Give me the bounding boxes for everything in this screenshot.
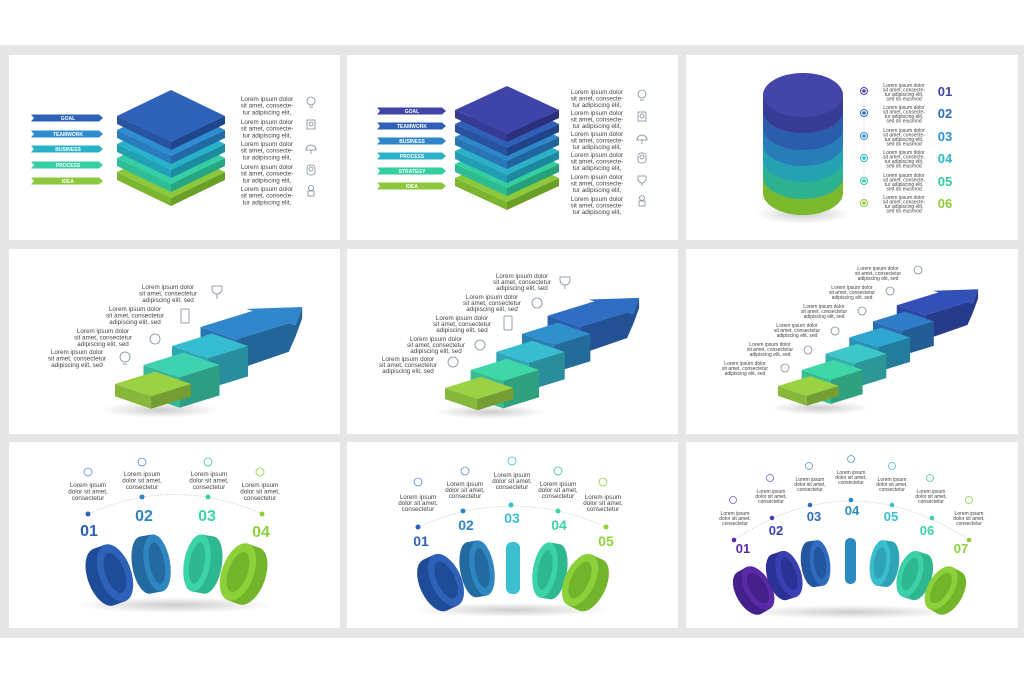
numbers: 01	[80, 523, 98, 540]
text blocks: tur adipiscing elit,	[243, 177, 292, 184]
text blocks: sit amet, consectetur	[801, 309, 847, 315]
text blocks: Lorem ipsum dolor	[883, 128, 925, 134]
text blocks: Lorem ipsum	[585, 494, 621, 501]
text blocks: Lorem ipsum dolor	[831, 285, 873, 291]
panel: rings 7	[686, 442, 1018, 628]
text blocks	[379, 273, 551, 375]
numbers: 06	[938, 196, 952, 211]
text blocks: Lorem ipsum	[796, 477, 824, 483]
text blocks: tur adipiscing elit,	[573, 123, 622, 130]
text blocks: Lorem ipsum dolor	[883, 195, 925, 201]
text blocks: Lorem ipsum dolor	[749, 342, 791, 348]
text blocks: Lorem ipsum dolor	[241, 119, 293, 126]
text blocks: tur adipiscing elit,	[885, 182, 923, 188]
icons	[781, 266, 922, 372]
text blocks: sit amet, consecte-	[883, 88, 925, 94]
numbers: 01	[736, 541, 750, 556]
text blocks: Lorem ipsum dolor	[571, 152, 623, 159]
text blocks: dolor sit amet,	[755, 494, 787, 500]
numbers: 04	[845, 503, 860, 518]
text blocks: sit amet, consecte-	[571, 202, 623, 210]
text blocks: tur adipiscing elit,	[573, 102, 622, 109]
text blocks: sit amet, consecte-	[241, 193, 293, 200]
text blocks: Lorem ipsum dolor	[77, 328, 129, 335]
text blocks: Lorem ipsum	[721, 511, 749, 517]
numbers: 02	[135, 508, 153, 525]
arc with dots	[416, 502, 608, 530]
shadow	[435, 405, 545, 419]
text blocks: consectetur	[449, 493, 481, 500]
text blocks: sit amet, consecte-	[883, 110, 925, 116]
text blocks: sit amet, consectetur	[106, 312, 164, 320]
text blocks: Lorem ipsum dolor	[109, 306, 161, 313]
text blocks: adipiscing elit, sed	[858, 276, 899, 282]
text blocks	[398, 472, 623, 513]
text blocks	[48, 284, 197, 369]
ribbon labels: TEAMWORK	[397, 124, 427, 130]
text blocks: sed do eiusmod	[886, 118, 922, 124]
stacked layers	[455, 86, 559, 210]
arc with dots	[732, 498, 971, 542]
text blocks: adipiscing elit, sed	[142, 297, 194, 304]
text blocks: tur adipiscing elit,	[243, 109, 292, 116]
ribbon labels: IDEA	[406, 184, 418, 190]
numbers: 03	[504, 510, 520, 526]
icons	[730, 456, 972, 504]
arc with dots	[86, 494, 264, 516]
text blocks: Lorem ipsum dolor	[142, 284, 194, 291]
panel: staircase 6	[686, 249, 1018, 434]
shadow	[100, 402, 220, 418]
text blocks: sit amet, consecte-	[883, 154, 925, 160]
text blocks: dolor sit amet,	[583, 500, 623, 507]
text blocks: Lorem ipsum dolor	[883, 173, 925, 179]
numbers: 04	[938, 151, 953, 166]
numbers	[736, 503, 968, 556]
text blocks: Lorem ipsum dolor	[466, 294, 518, 301]
text blocks: dolor sit amet,	[240, 488, 280, 496]
ribbon labels: GOAL	[61, 116, 75, 122]
text blocks: Lorem ipsum dolor	[803, 304, 845, 310]
text blocks: dolor sit amet,	[68, 488, 108, 496]
text blocks: adipiscing elit, sed	[51, 362, 103, 369]
text blocks: dolor sit amet,	[189, 478, 229, 484]
text blocks: Lorem ipsum	[242, 482, 278, 489]
text blocks: Lorem ipsum dolor	[571, 110, 623, 117]
ribbon labels: IDEA	[62, 179, 74, 185]
text blocks: sit amet, consecte-	[883, 200, 925, 206]
text blocks	[241, 96, 293, 206]
text blocks	[571, 89, 623, 216]
numbers: 05	[598, 533, 614, 549]
numbers: 04	[252, 524, 270, 541]
text blocks: tur adipiscing elit,	[885, 204, 923, 210]
text blocks: Lorem ipsum dolor	[883, 150, 925, 156]
text blocks: sed do eiusmod	[886, 186, 922, 192]
text blocks: consectetur	[72, 495, 104, 502]
rings	[410, 538, 616, 617]
numbers: 01	[938, 84, 952, 99]
text blocks: Lorem ipsum dolor	[241, 141, 293, 148]
stairs	[445, 298, 639, 410]
text blocks: tur adipiscing elit,	[573, 187, 622, 194]
text blocks: dolor sit amet,	[794, 482, 826, 488]
text blocks: Lorem ipsum dolor	[241, 96, 293, 103]
numbers: 01	[413, 533, 429, 549]
text blocks: adipiscing elit, sed	[496, 285, 548, 292]
text blocks: consectetur	[193, 484, 225, 491]
text blocks: Lorem ipsum dolor	[571, 89, 623, 96]
text blocks: sit amet, consectetur	[407, 342, 465, 349]
icons	[84, 458, 264, 476]
numbers	[80, 508, 270, 541]
text blocks: Lorem ipsum	[837, 470, 865, 476]
ribbon labels: BUSINESS	[399, 139, 425, 145]
text blocks: adipiscing elit, sed	[466, 306, 518, 313]
ribbon labels	[377, 108, 446, 190]
text blocks: consectetur	[797, 487, 823, 493]
ribbon labels: PROCESS	[56, 163, 81, 169]
text blocks: sed do eiusmod	[886, 96, 922, 102]
numbers: 05	[938, 174, 952, 189]
text blocks: sit amet, consecte-	[571, 138, 623, 144]
text blocks: sit amet, consectetur	[379, 362, 437, 369]
timeline dots	[860, 88, 868, 206]
panel: cylinder 6	[686, 55, 1018, 240]
text blocks: consectetur	[244, 495, 276, 502]
text blocks: Lorem ipsum dolor	[241, 164, 293, 171]
text blocks: Lorem ipsum dolor	[883, 83, 925, 89]
numbers: 04	[551, 517, 567, 533]
text blocks: sed do eiusmod	[886, 208, 922, 214]
text blocks: sit amet, consecte-	[571, 180, 623, 188]
numbers	[938, 84, 953, 211]
text blocks: tur adipiscing elit,	[885, 137, 923, 143]
text blocks: sit amet, consecte-	[571, 96, 623, 102]
icons	[414, 457, 607, 486]
text blocks: sit amet, consectetur	[493, 279, 551, 286]
text blocks: Lorem ipsum	[955, 511, 983, 517]
text blocks: Lorem ipsum dolor	[436, 315, 488, 322]
text blocks: consectetur	[587, 506, 619, 513]
shadow	[741, 605, 961, 619]
shadow	[755, 204, 851, 224]
text blocks: sit amet, consecte-	[883, 178, 925, 184]
text blocks: sit amet, consecte-	[571, 116, 623, 124]
ribbon labels: BUSINESS	[55, 147, 81, 153]
text blocks: Lorem ipsum	[494, 472, 530, 479]
text blocks: adipiscing elit, sed	[77, 341, 129, 348]
text blocks: dolor sit amet,	[915, 494, 947, 500]
text blocks: consectetur	[126, 484, 158, 491]
numbers: 02	[938, 106, 952, 121]
numbers: 05	[884, 509, 898, 524]
text blocks: tur adipiscing elit,	[885, 159, 923, 165]
text blocks: Lorem ipsum dolor	[382, 356, 434, 363]
text blocks: sit amet, consecte-	[241, 126, 293, 133]
text blocks: dolor sit amet,	[445, 487, 485, 494]
text blocks	[68, 471, 280, 502]
text blocks	[722, 266, 901, 377]
text blocks: dolor sit amet,	[538, 487, 578, 494]
text blocks: sit amet, consecte-	[241, 103, 293, 110]
text blocks: consectetur	[956, 521, 982, 527]
text blocks: adipiscing elit, sed	[109, 319, 161, 326]
text blocks: Lorem ipsum dolor	[857, 266, 899, 272]
shadow	[770, 401, 870, 415]
text blocks: Lorem ipsum	[757, 489, 785, 495]
panel: staircase 5	[347, 249, 678, 434]
numbers: 02	[458, 517, 474, 533]
text blocks: Lorem ipsum dolor	[571, 196, 623, 203]
text blocks: sit amet, consectetur	[433, 321, 491, 328]
panel: layered stack 6	[347, 55, 678, 240]
text blocks: Lorem ipsum	[540, 481, 576, 488]
numbers	[413, 510, 614, 549]
numbers: 03	[938, 129, 952, 144]
text blocks: Lorem ipsum	[400, 494, 436, 501]
text blocks: sit amet, consecte-	[241, 148, 293, 155]
text blocks: Lorem ipsum dolor	[496, 273, 548, 280]
text blocks: Lorem ipsum dolor	[724, 361, 766, 367]
text blocks: sit amet, consectetur	[747, 347, 793, 353]
text blocks: Lorem ipsum	[447, 481, 483, 488]
stairs	[778, 289, 978, 406]
text blocks: Lorem ipsum dolor	[776, 323, 818, 329]
ribbon labels	[31, 114, 103, 185]
ribbon labels: PROCESS	[400, 154, 425, 160]
text blocks: Lorem ipsum	[124, 471, 160, 478]
text blocks: adipiscing elit, sed	[804, 314, 845, 320]
text blocks: dolor sit amet,	[719, 516, 751, 522]
ribbon labels: STRATEGY	[399, 169, 426, 175]
text blocks: sit amet, consecte-	[241, 171, 293, 178]
panel: rings 4	[9, 442, 340, 628]
ribbon labels: GOAL	[405, 109, 419, 115]
text blocks: adipiscing elit, sed	[725, 371, 766, 377]
text blocks: sit amet, consectetur	[829, 290, 875, 296]
text blocks: tur adipiscing elit,	[243, 154, 292, 161]
panel: staircase 4	[9, 249, 340, 434]
numbers: 02	[769, 523, 783, 538]
text blocks: Lorem ipsum dolor	[571, 131, 623, 138]
shadow	[412, 603, 612, 617]
text blocks: Lorem ipsum dolor	[51, 349, 103, 356]
numbers: 06	[920, 523, 934, 538]
numbers: 03	[198, 508, 216, 525]
stairs	[115, 307, 302, 409]
icons	[448, 277, 570, 367]
text blocks: sit amet, consecte-	[571, 158, 623, 166]
text blocks: sed do eiusmod	[886, 142, 922, 148]
text blocks: Lorem ipsum dolor	[410, 336, 462, 343]
text blocks: sit amet, consectetur	[74, 334, 132, 342]
text blocks	[883, 83, 925, 214]
text blocks: dolor sit amet,	[953, 516, 985, 522]
text blocks: adipiscing elit, sed	[832, 295, 873, 301]
cylinder layers	[763, 73, 843, 215]
text blocks: consectetur	[722, 521, 748, 527]
numbers: 07	[954, 541, 968, 556]
text blocks: tur adipiscing elit,	[885, 92, 923, 98]
icons	[306, 97, 316, 196]
text blocks: tur adipiscing elit,	[573, 165, 622, 172]
text blocks: sit amet, consectetur	[855, 271, 901, 277]
text blocks: adipiscing elit, sed	[777, 333, 818, 339]
text blocks: dolor sit amet,	[398, 500, 438, 507]
text blocks: adipiscing elit, sed	[750, 352, 791, 358]
text blocks	[719, 470, 985, 527]
text blocks: sit amet, consectetur	[774, 328, 820, 334]
text blocks: tur adipiscing elit,	[885, 114, 923, 120]
text blocks: sit amet, consectetur	[139, 290, 197, 298]
text blocks: tur adipiscing elit,	[243, 199, 292, 206]
text blocks: Lorem ipsum	[917, 489, 945, 495]
text blocks: sed do eiusmod	[886, 164, 922, 170]
rings	[78, 532, 275, 611]
shadow	[75, 597, 275, 613]
text blocks: consectetur	[838, 480, 864, 486]
text blocks: sit amet, consectetur	[48, 356, 106, 362]
text blocks: tur adipiscing elit,	[573, 209, 622, 216]
text blocks: tur adipiscing elit,	[573, 144, 622, 151]
text blocks: sit amet, consectetur	[722, 366, 768, 372]
text blocks: Lorem ipsum	[878, 477, 906, 483]
text blocks: Lorem ipsum dolor	[241, 186, 293, 193]
text blocks: Lorem ipsum dolor	[571, 174, 623, 181]
text blocks: sit amet, consectetur	[463, 300, 521, 307]
text blocks: adipiscing elit, sed	[382, 368, 434, 375]
icons	[120, 286, 222, 364]
panel: rings 5	[347, 442, 678, 628]
text blocks: consectetur	[402, 506, 434, 513]
text blocks: dolor sit amet,	[122, 478, 162, 484]
text blocks: Lorem ipsum	[191, 471, 227, 478]
text blocks: consectetur	[542, 493, 574, 500]
text blocks: adipiscing elit, sed	[410, 348, 462, 355]
text blocks: Lorem ipsum	[70, 482, 106, 489]
rings	[726, 538, 973, 620]
text blocks: dolor sit amet,	[492, 478, 532, 485]
text blocks: adipiscing elit, sed	[436, 327, 488, 334]
text blocks: Lorem ipsum dolor	[883, 105, 925, 111]
ribbon labels: TEAMWORK	[53, 132, 83, 138]
text blocks: consectetur	[496, 484, 528, 491]
text blocks: tur adipiscing elit,	[243, 132, 292, 139]
icons	[637, 90, 647, 206]
text blocks: consectetur	[918, 499, 944, 505]
text blocks: consectetur	[758, 499, 784, 505]
panel: layered stack 5	[9, 55, 340, 240]
numbers: 03	[807, 509, 821, 524]
text blocks: consectetur	[879, 487, 905, 493]
text blocks: dolor sit amet,	[876, 482, 908, 488]
text blocks: sit amet, consecte-	[883, 132, 925, 138]
text blocks: dolor sit amet,	[835, 475, 867, 481]
stacked layers	[117, 90, 225, 206]
